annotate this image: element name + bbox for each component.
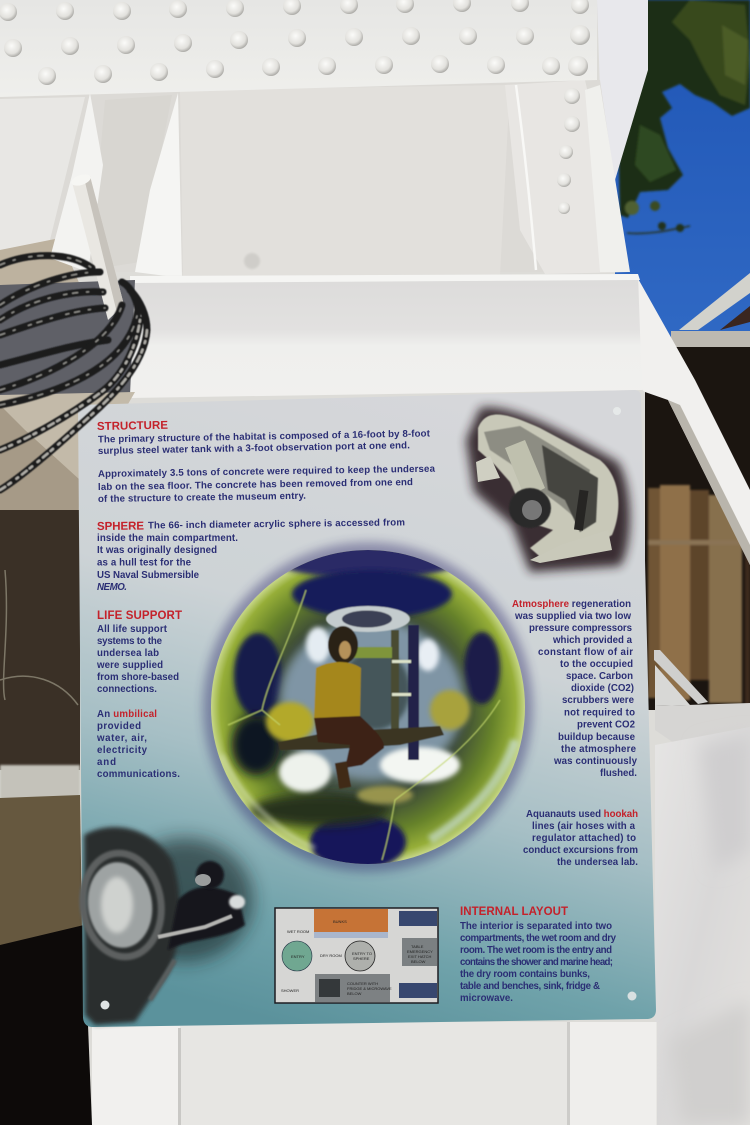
text block: sphere: SPHERE bbox=[97, 521, 144, 533]
text block: sphere bbox=[97, 517, 405, 593]
sphere: bench bbox=[278, 726, 444, 750]
text block: atmosphere: was supplied via two low bbox=[514, 611, 631, 622]
text block: sphere: US Naval Submersible bbox=[97, 570, 200, 581]
background: wooden fence bbox=[648, 485, 750, 705]
sphere: dark patches bbox=[234, 633, 282, 717]
gusset left bbox=[50, 93, 103, 272]
text block: life support: LIFE SUPPORT bbox=[97, 610, 182, 622]
panel: internal layout floor plan: ENTRY bbox=[291, 954, 305, 959]
panel: acrylic sphere photo bbox=[203, 542, 533, 872]
background: house roof and dark eaves bbox=[645, 273, 750, 710]
text block: life support: systems to the bbox=[97, 636, 163, 647]
text block: atmosphere: which provided a bbox=[552, 635, 633, 646]
panel: internal layout floor plan: EMERGENCY bbox=[407, 949, 433, 954]
text block: atmosphere: prevent CO2 bbox=[577, 720, 635, 730]
text block: structure: of the structure to create the museum entry. bbox=[98, 491, 306, 505]
background: platform and right wall bbox=[655, 703, 750, 1125]
background: lower column below sign bbox=[92, 1022, 657, 1125]
plan: bunks bbox=[314, 909, 388, 933]
text block: hookah: the undersea lab. bbox=[557, 857, 638, 868]
background: blue sky bbox=[615, 0, 750, 345]
text block: atmosphere bbox=[512, 599, 638, 779]
text block: structure: The primary structure of the habitat is composed of a 16-foot by 8-foot bbox=[98, 428, 431, 445]
text block: internal layout: room. The wet room is the entry and bbox=[460, 945, 612, 956]
text block: atmosphere: pressure compressors bbox=[529, 623, 632, 634]
sphere: dark blue bottom bbox=[310, 814, 406, 870]
text block: life support bbox=[96, 610, 182, 780]
background: upper column bbox=[0, 80, 630, 285]
panel: internal layout floor plan: SPHERE bbox=[353, 956, 370, 961]
gusset right bbox=[135, 93, 182, 278]
text block: sphere: It was originally designed bbox=[97, 545, 217, 556]
text block: atmosphere: constant flow of air bbox=[538, 647, 633, 658]
text block: atmosphere: the atmosphere bbox=[561, 744, 637, 755]
background: white sleeve at upper right bbox=[597, 0, 648, 190]
background: riveted top plate bbox=[0, 0, 597, 214]
text block: life support: provided bbox=[97, 721, 141, 732]
background: left side behind sign bbox=[0, 280, 135, 1125]
sphere: rim highlights bbox=[430, 740, 515, 840]
panel: internal layout floor plan: COUNTER WITH bbox=[347, 981, 378, 986]
text block: life support: All life support bbox=[97, 624, 168, 635]
plan: bottom right blue block bbox=[399, 983, 437, 998]
text block: internal layout: table and benches, sink, fridge & bbox=[460, 981, 600, 992]
mounting screw bottom left bbox=[100, 1000, 110, 1010]
text block: sphere: NEMO. bbox=[97, 582, 127, 593]
plan: counter bbox=[315, 974, 390, 1002]
text block: hookah: conduct excursions from bbox=[523, 845, 638, 856]
panel: cutaway illustration of habitat bbox=[466, 407, 630, 572]
sphere: hatch ring bbox=[326, 606, 410, 632]
panel: internal layout floor plan bbox=[275, 908, 438, 1003]
panel: internal layout floor plan: FRIDGE & MICROWAVE bbox=[347, 986, 392, 991]
text block: life support: and bbox=[97, 757, 116, 768]
mounting screw bottom right bbox=[628, 992, 636, 1000]
panel: internal layout floor plan: BELOW bbox=[347, 991, 362, 996]
text block: hookah: lines (air hoses with a bbox=[532, 821, 636, 832]
plan: top right blue block bbox=[399, 911, 437, 926]
text block: life support: from shore-based bbox=[97, 672, 179, 683]
panel: internal layout floor plan: ENTRY TO bbox=[352, 951, 372, 956]
background: tree foliage bbox=[618, 0, 750, 233]
panel: internal layout floor plan: SHOWER bbox=[281, 988, 299, 993]
plan: table bbox=[402, 938, 437, 966]
panel: internal layout floor plan: EXIT HATCH bbox=[408, 954, 432, 959]
text block: atmosphere: Atmosphere regeneration bbox=[512, 599, 631, 610]
text block: internal layout: the dry room contains bunks, bbox=[460, 969, 590, 980]
text block: atmosphere: was continuously bbox=[553, 756, 638, 767]
sphere: bright core bbox=[280, 620, 464, 780]
text block: sphere: as a hull test for the bbox=[97, 558, 192, 568]
panel: internal layout floor plan: TABLE bbox=[411, 944, 424, 949]
coiled black hose bbox=[0, 256, 147, 490]
text block: hookah bbox=[523, 809, 638, 868]
panel: internal layout floor plan: DRY ROOM bbox=[320, 953, 342, 958]
panel: internal layout floor plan: BUNKS bbox=[333, 919, 347, 924]
background: ledge above sign bbox=[130, 274, 642, 398]
text block: structure: surplus steel water tank with a 3-foot observation port at one end. bbox=[98, 440, 410, 457]
background: diagonal white strut bbox=[636, 275, 750, 565]
text block: life support: water, air, bbox=[96, 733, 147, 744]
sphere: green frame lines bbox=[228, 590, 500, 860]
panel background bbox=[78, 390, 656, 1027]
text block: atmosphere: scrubbers were bbox=[562, 695, 635, 706]
text block: internal layout: contains the shower and marine head; bbox=[460, 957, 613, 968]
white vertical pipe bbox=[70, 172, 124, 320]
text block: internal layout bbox=[460, 906, 617, 1004]
text block: hookah: regulator attached) to bbox=[532, 833, 636, 844]
text block: atmosphere: flushed. bbox=[600, 768, 637, 779]
text block: atmosphere: to the occupied bbox=[560, 659, 633, 670]
panel: diver photo bbox=[76, 827, 253, 1025]
plan: room labels: WET ROOM bbox=[287, 929, 309, 934]
text block: life support: connections. bbox=[97, 684, 157, 695]
text block: atmosphere: not required to bbox=[564, 708, 635, 718]
text block: sphere: inside the main compartment. bbox=[97, 533, 238, 544]
text block: internal layout: compartments, the wet room and dry bbox=[460, 933, 617, 944]
text block: internal layout: The interior is separated into two bbox=[460, 921, 612, 932]
panel: internal layout floor plan: BELOW bbox=[411, 959, 426, 964]
text block: internal layout: INTERNAL LAYOUT bbox=[460, 906, 568, 918]
text block: life support: were supplied bbox=[96, 660, 163, 671]
text block: sphere: The 66- inch diameter acrylic sphere is accessed from bbox=[148, 517, 405, 531]
text block: life support: undersea lab bbox=[97, 648, 159, 659]
text block: life support: communications. bbox=[97, 769, 180, 780]
text block: structure: Approximately 3.5 tons of concrete were required to keep the undersea bbox=[98, 464, 436, 480]
background: handrail bbox=[654, 650, 708, 706]
text block: internal layout: microwave. bbox=[460, 993, 513, 1004]
text block: atmosphere: dioxide (CO2) bbox=[571, 683, 634, 694]
text block: structure: lab on the sea floor. The concrete has been removed from one end bbox=[98, 477, 413, 493]
plan: entry circle bbox=[282, 941, 312, 971]
text block: structure bbox=[97, 420, 436, 505]
panel: text and headings bbox=[96, 420, 638, 1004]
sign panel bbox=[76, 390, 656, 1027]
text block: life support: electricity bbox=[97, 745, 148, 756]
text block: hookah: Aquanauts used hookah bbox=[526, 809, 638, 820]
plan: entry to sphere circle bbox=[345, 941, 375, 971]
text block: structure: STRUCTURE bbox=[97, 420, 168, 433]
sphere: person seated bbox=[314, 626, 384, 789]
sphere: ladder bbox=[352, 625, 419, 760]
text block: atmosphere: space. Carbon bbox=[566, 671, 633, 682]
text block: life support: An umbilical bbox=[97, 709, 157, 720]
text block: atmosphere: buildup because bbox=[558, 732, 636, 743]
sphere: dark blue top bbox=[286, 550, 450, 578]
